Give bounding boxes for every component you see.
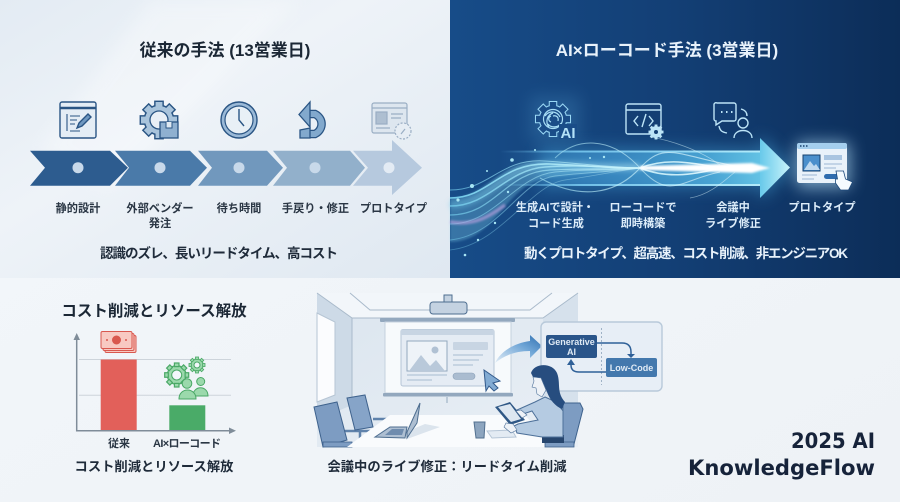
step labels: conventional (56, 201, 427, 230)
meeting table and chairs (314, 395, 552, 447)
heading: conventional method: 従来の手法 (13営業日) (140, 40, 310, 60)
icon: AI gear (530, 96, 580, 142)
summary: conventional problems: 認識のズレ、長いリードタイム、高コスト (100, 245, 338, 261)
heading: AI low-code method: AI×ローコード手法 (3営業日) (556, 40, 778, 60)
icon: low-code window (626, 104, 664, 140)
icon: static design document (60, 102, 96, 138)
panel: cost reduction chart (61, 302, 247, 474)
panel: live-editing meeting scene (314, 293, 662, 474)
curved arrow to workflow (495, 335, 542, 363)
brand mark: 2025 AI (791, 429, 875, 453)
icon: money stack (101, 332, 136, 352)
step labels: conventional: プロトタイプ (360, 202, 427, 215)
box: generative AI: Generative (548, 337, 595, 347)
icon: clock (221, 102, 257, 138)
step labels: AI: ライブ修正 (705, 216, 761, 230)
icon: gear and package (141, 102, 178, 138)
brand mark: KnowledgeFlow (688, 456, 875, 480)
process chevrons (30, 140, 422, 195)
step labels: AI: 生成AIで設計・ (516, 200, 594, 214)
caption: cost reduction: コスト削減とリソース解放 (75, 458, 234, 474)
step labels: AI: プロトタイプ (788, 201, 856, 214)
cursor (484, 370, 500, 391)
coffee cup (474, 422, 485, 438)
step labels: conventional: 待ち時間 (217, 201, 261, 215)
meeting room (317, 293, 578, 447)
bar: AI low-code (169, 405, 205, 430)
bar: conventional (101, 360, 137, 430)
projector (430, 295, 467, 314)
icon: gears and people (165, 357, 208, 399)
brand mark (688, 429, 875, 480)
bar labels: 従来 (108, 436, 130, 450)
caption: live editing: 会議中のライブ修正：リードタイム削減 (327, 458, 567, 474)
callout: generative AI and low-code loop (541, 322, 662, 391)
gridlines and axes (74, 333, 236, 434)
panel: conventional method (0, 0, 450, 278)
panel: AI low-code method (450, 0, 900, 278)
step labels: conventional: 外部ベンダー (126, 201, 194, 215)
step labels: AI: 会議中 (716, 200, 750, 214)
step labels: AI: 即時構築 (621, 216, 665, 230)
bar labels (108, 436, 221, 450)
summary: AI benefits: 動くプロトタイプ、超高速、コスト削減、非エンジニアOK (524, 245, 848, 261)
projection screen (380, 318, 515, 403)
step labels: conventional: 手戻り・修正 (282, 201, 349, 215)
icon: glowing prototype window (796, 142, 852, 190)
heading: cost reduction: コスト削減とリソース解放 (61, 302, 247, 320)
icon: rework arrow (299, 102, 322, 138)
box: generative AI (546, 335, 597, 358)
papers (487, 430, 516, 438)
box: low-code: Low-Code (610, 363, 653, 373)
icon: live feedback (714, 103, 752, 138)
screen wireframe window (401, 330, 494, 386)
step labels: AI: コード生成 (528, 216, 584, 230)
woman with tablet (495, 365, 583, 447)
step labels: conventional: 静的設計 (56, 201, 100, 215)
step labels: conventional: 発注 (149, 216, 171, 230)
laptop (375, 403, 440, 439)
box: generative AI: AI (567, 347, 576, 357)
flow arrow with waves (450, 134, 794, 256)
step labels: AI (516, 200, 856, 230)
icon: AI gear: AI (560, 125, 576, 142)
step labels: AI: ローコードで (609, 202, 677, 214)
icon: prototype window faded (372, 103, 411, 139)
bar labels: AI×ローコード (153, 438, 221, 450)
